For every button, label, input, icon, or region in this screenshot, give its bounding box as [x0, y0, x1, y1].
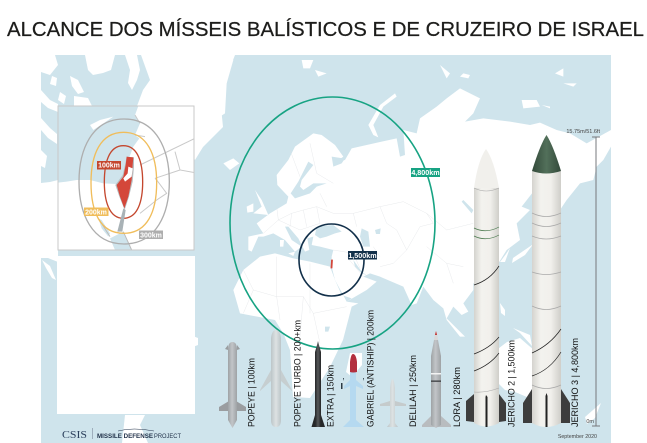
world map [41, 55, 611, 443]
label Popeye Turbo: POPEYE TURBO | 200+km [292, 320, 302, 427]
label Extra: EXTRA | 150km [326, 365, 336, 427]
missile: Jericho 3 [523, 135, 570, 427]
1,500 km range ring [299, 224, 364, 296]
label 200km: 200km [85, 209, 107, 216]
range ring 200 km [91, 132, 157, 233]
range ring 300 km [79, 119, 169, 244]
land: Eurasia and Africa [220, 57, 611, 398]
CSIS logo: PROJECT [154, 433, 181, 440]
white legend panel [57, 256, 195, 414]
CSIS logo: MISSILE DEFENSE [97, 433, 154, 440]
label Gabriel: GABRIEL (ANTISHIP) | 200km [366, 310, 376, 427]
label 100km: 100km [98, 163, 120, 170]
label Delilah: DELILAH | 250km [408, 355, 418, 427]
CSIS logo [62, 428, 181, 441]
4,800 km range ring [230, 97, 435, 349]
range ring 100 km [104, 146, 143, 218]
label Jericho 3: JERICHO 3 | 4,800km [570, 338, 580, 427]
missile: Delilah [380, 379, 406, 427]
missile: Gabriel [341, 354, 364, 427]
land: Greenland and North America [41, 55, 235, 443]
label 4,800km: 4,800km [411, 168, 440, 177]
missile: Jericho 2 [466, 149, 506, 427]
label 1,500km: 1,500km [348, 251, 377, 260]
title: ALCANCE DOS MÍSSEIS BALÍSTICOS E DE CRUZEIRO DE ISRAEL [7, 18, 644, 41]
label Popeye: POPEYE | 100km [246, 358, 256, 427]
label Jericho 2: JERICHO 2 | 1,500km [506, 340, 516, 427]
Israel [115, 157, 134, 232]
Israel marker [331, 260, 332, 268]
water bodies [291, 153, 532, 332]
height scale: 15.75m/51.6ft [566, 129, 600, 135]
height scale: 0m [586, 419, 594, 425]
inset sea [58, 106, 140, 184]
land: south-east Asia, Australia, islands [346, 243, 601, 424]
height scale [566, 129, 600, 426]
label Lora: LORA | 280km [452, 367, 462, 427]
missile: Extra [312, 341, 325, 427]
country borders [243, 143, 473, 343]
CSIS logo: CSIS [62, 430, 87, 441]
missile: Popeye [219, 342, 246, 428]
missile: Popeye Turbo [260, 330, 292, 427]
inset map [58, 106, 195, 250]
missile: Lora [422, 331, 451, 428]
label 300km: 300km [140, 232, 162, 239]
date: September 2020 [558, 434, 597, 440]
